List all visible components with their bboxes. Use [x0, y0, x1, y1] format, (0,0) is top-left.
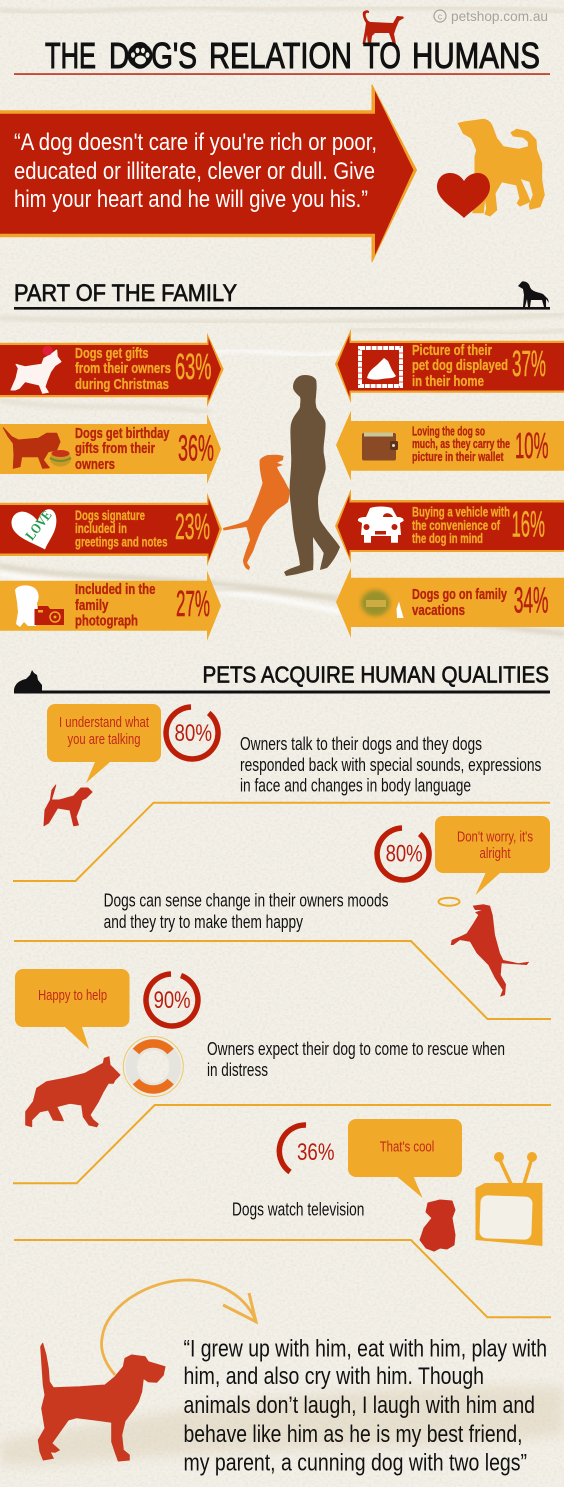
curved arrow [102, 1280, 256, 1375]
panel: left arrow 3, signature in greetings: 23% [175, 506, 210, 547]
closing quote [184, 1336, 547, 1477]
panel: left arrow 3, signature in greetings: Dogs signature [75, 508, 145, 523]
title: RELATION [209, 35, 352, 76]
panel: right arrow 1, picture in home: pet dog displayed [412, 357, 508, 374]
speech bubble 4: That's cool [380, 1139, 434, 1156]
panel: left arrow 1, christmas gifts: Dogs get gifts [75, 345, 148, 362]
speech bubble 3 [15, 969, 130, 1049]
panel: right arrow 1, picture in home: in their home [412, 373, 484, 390]
divider line 2 [14, 941, 551, 1019]
icon: gold dog with heart [437, 119, 544, 218]
title underline [14, 73, 550, 75]
text: watch television: Dogs watch television [232, 1200, 364, 1220]
speech bubble 4 [348, 1119, 462, 1198]
title: HUMANS [412, 35, 540, 76]
speech bubble 2: alright [480, 845, 511, 862]
text: rescue: in distress [207, 1060, 268, 1080]
title: TO [363, 35, 401, 76]
speech bubble 3: Happy to help [38, 987, 107, 1004]
icon: black cat [14, 670, 42, 691]
panel: left arrow 1, christmas gifts [0, 333, 224, 407]
icon: love heart [12, 508, 56, 550]
quote arrow: him your heart and he will give you his.” [14, 186, 368, 213]
ring chart: 36% television [279, 1125, 334, 1172]
panel: left arrow 4, family photograph: photograph [75, 613, 138, 630]
heading: pets acquire human qualities [14, 662, 550, 694]
panel: right arrow 2, picture in wallet: picture in their wallet [412, 449, 504, 464]
icon: bloodhound [38, 1343, 165, 1461]
panel: left arrow 2, birthday gifts: gifts from their [75, 440, 155, 457]
icon: white dog and camera [15, 585, 64, 627]
text: sense moods: Dogs can sense change in their owners moods [104, 891, 388, 911]
speech bubble 2: Don't worry, it's [457, 829, 533, 846]
text: sense moods: and they try to make them happy [104, 912, 303, 932]
quote arrow [0, 85, 416, 262]
divider line 4 [14, 1240, 551, 1317]
icon: framed dog picture [360, 348, 401, 386]
panel: left arrow 1, christmas gifts: during Christmas [75, 376, 169, 393]
panel: left arrow 2, birthday gifts [0, 414, 221, 484]
text: owners talk: Owners talk to their dogs and they dogs [240, 734, 482, 754]
icon: jumping dog [451, 904, 529, 997]
panel: left arrow 1, christmas gifts: from their owners [75, 360, 171, 377]
speech bubble 1: you are talking [68, 731, 140, 748]
panel: left arrow 2, birthday gifts: 36% [178, 428, 214, 469]
icon: dog with birthday cake [3, 428, 71, 468]
title: THE [45, 35, 96, 76]
icon: vacation scene with dog [361, 590, 404, 618]
watermark: petshop.com.au: petshop.com.au [451, 8, 548, 24]
text: rescue [207, 1039, 505, 1080]
ring chart: 80% talking: 80% [174, 720, 212, 747]
divider line 1 [13, 803, 550, 881]
text: owners talk: in face and changes in body language [240, 776, 471, 796]
ring chart: 36% television: 36% [297, 1139, 334, 1166]
speech bubble 1 [47, 704, 161, 783]
panel: left arrow 1, christmas gifts: 63% [175, 346, 212, 387]
panel: left arrow 2, birthday gifts: owners [75, 456, 115, 473]
panel: right arrow 4, family vacations: Dogs go on family [412, 586, 507, 603]
title: DOG'S [109, 35, 197, 76]
panel: right arrow 2, picture in wallet: much, as they carry the [412, 436, 510, 451]
speech bubble 1: I understand what [59, 714, 150, 731]
panel: left arrow 4, family photograph: 27% [176, 583, 210, 624]
icon: black dog [518, 281, 549, 307]
panel: left arrow 2, birthday gifts: Dogs get birthday [75, 425, 170, 442]
panel: left arrow 4, family photograph: Included in the [75, 581, 156, 598]
panel: left arrow 3, signature in greetings: included in [75, 521, 127, 536]
panel: right arrow 3, vehicle [335, 489, 564, 563]
icon: life ring [123, 1036, 183, 1096]
divider line 3 [13, 1105, 551, 1183]
icon: white car with dog [358, 506, 404, 543]
icon: beagle [44, 785, 92, 826]
closing quote: him, and also cry with him. Though [184, 1363, 484, 1390]
icon: frisbee [438, 898, 460, 906]
icon: television [476, 1152, 542, 1246]
icon: human silhouette [284, 375, 340, 576]
ring chart: 80% moods [377, 828, 429, 880]
watermark: petshop.com.au: c [438, 12, 443, 22]
panel: right arrow 3, vehicle: the convenience of [412, 518, 500, 533]
icon: love heart: LOVE [23, 508, 55, 543]
panel: left arrow 4, family photograph: family [75, 597, 109, 614]
panel: left arrow 3, signature in greetings [0, 493, 222, 566]
icon: white dog with santa hat [11, 346, 61, 393]
heading: part of the family: PART OF THE FAMILY [14, 280, 237, 307]
title [45, 35, 540, 76]
panel: right arrow 3, vehicle: the dog in mind [412, 531, 483, 546]
text: owners talk [240, 734, 541, 796]
ring chart: 80% talking [166, 707, 218, 759]
icon: german shepherd [26, 1057, 120, 1127]
ring chart: 80% moods: 80% [386, 841, 423, 868]
panel: right arrow 2, picture in wallet: Loving the dog so [412, 424, 485, 439]
panel: right arrow 4, family vacations [336, 568, 564, 638]
panel: left arrow 3, signature in greetings: greetings and notes [75, 535, 168, 550]
speech bubble 2 [435, 816, 550, 895]
icon: orange dog jumping on human [223, 455, 290, 570]
icon: wallet [362, 432, 398, 460]
panel: right arrow 4, family vacations: vacations [412, 602, 465, 619]
panel: right arrow 1, picture in home: Picture of their [412, 342, 492, 359]
panel: right arrow 3, vehicle: Buying a vehicle with [412, 505, 510, 520]
text: sense moods [104, 891, 388, 932]
icon: pug [420, 1200, 455, 1251]
panel: right arrow 1, picture in home [335, 329, 564, 403]
ring chart: 90% rescue [146, 974, 198, 1026]
ring chart: 90% rescue: 90% [154, 987, 191, 1014]
quote arrow: “A dog doesn't care if you're rich or poor, [14, 129, 377, 156]
panel: left arrow 4, family photograph [0, 571, 221, 641]
icon: red dog on title [362, 10, 404, 44]
quote arrow: educated or illiterate, clever or dull. Give [14, 158, 375, 185]
panel: right arrow 2, picture in wallet [336, 411, 564, 481]
